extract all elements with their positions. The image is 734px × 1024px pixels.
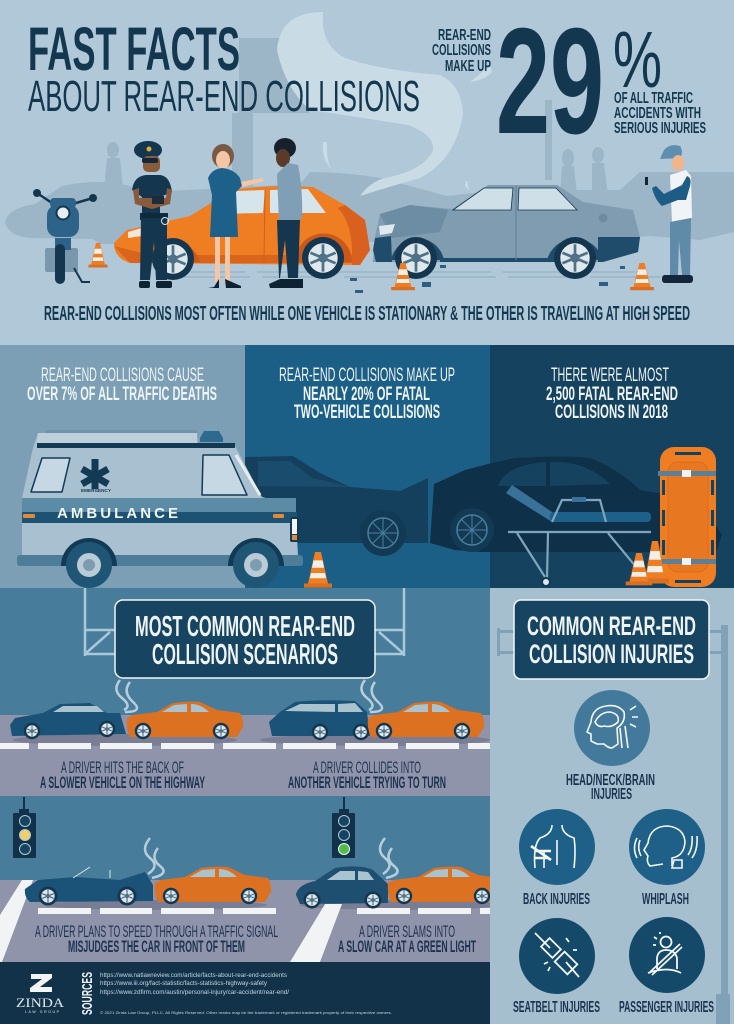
copyright: © 2021 Zinda Law Group, PLLC. All Rights Reserved. Other marks may be the trademark or registered trademark property of their respective owners. — [100, 1011, 392, 1015]
crosswalk stripes and lanes — [0, 880, 490, 962]
backboard — [658, 447, 716, 587]
source links — [100, 972, 289, 996]
road row 1 — [0, 715, 490, 796]
cone centre — [391, 263, 415, 290]
icon: head, neck and brain — [574, 690, 650, 766]
title: ABOUT REAR-END COLLISIONS — [28, 72, 420, 121]
sign: most common scenarios: COLLISION SCENARIOS — [152, 639, 338, 671]
caption: scenario 4: A DRIVER SLAMS INTO — [359, 922, 455, 941]
cone left — [88, 243, 108, 267]
icon: whiplash — [629, 809, 705, 885]
caption: scenario 4: A SLOW CAR AT A GREEN LIGHT — [338, 937, 476, 956]
sign: most common scenarios — [115, 600, 375, 678]
grey car — [373, 185, 640, 279]
stat text: fatal two-vehicle: NEARLY 20% OF FATAL — [303, 384, 430, 405]
silhouette car right — [430, 456, 722, 552]
label: head neck brain — [566, 772, 655, 803]
caption: scenario 2 — [288, 759, 446, 792]
caption: scenario 3: MISJUDGES THE CAR IN FRONT OF THEM — [68, 937, 245, 956]
source links: https://www.zdfirm.com/austin/personal-injury/car-accident/rear-end/ — [100, 989, 289, 996]
scenario 4 cars — [296, 866, 504, 908]
panel: fatal two-vehicle — [245, 345, 490, 588]
smoke wisps row 1 — [116, 680, 382, 712]
gantry pole: injuries sign — [497, 625, 730, 1024]
caption: scenario 1: A DRIVER HITS THE BACK OF — [61, 759, 184, 777]
label: whiplash: WHIPLASH — [642, 891, 689, 908]
logo: Zinda Law Group: ZINDA — [16, 995, 65, 1010]
ambulance — [17, 430, 303, 588]
label: head neck brain: INJURIES — [591, 786, 632, 803]
motorcycle — [33, 189, 97, 284]
logo: Zinda Law Group: LAW GROUP — [25, 1010, 60, 1014]
source links: https://www.iii.org/fact-statistic/facts-statistics-highway-safety — [100, 980, 268, 987]
cones on stretcher panel — [626, 541, 669, 585]
scenario 3 cars — [25, 867, 271, 906]
stat text: traffic deaths: REAR-END COLLISIONS CAUSE — [41, 365, 204, 386]
road row 2 — [0, 880, 490, 962]
stat text: fatal two-vehicle — [279, 365, 455, 423]
ambulance: EMERGENCY — [81, 488, 111, 493]
title: FAST FACTS — [28, 15, 240, 83]
icon: passenger — [629, 917, 705, 993]
gantry: scenarios sign — [85, 588, 404, 656]
cone right — [630, 263, 654, 290]
source links: https://www.natlawreview.com/article/facts-about-rear-end-accidents — [100, 972, 287, 979]
traffic light: green — [332, 797, 355, 858]
label: back: BACK INJURIES — [523, 891, 590, 908]
traffic light: yellow — [13, 797, 36, 858]
orange car — [114, 186, 370, 280]
background: header panel — [0, 0, 734, 343]
icon: seatbelt — [519, 918, 595, 994]
statistic: 29 percent: COLLISIONS — [432, 42, 491, 59]
smoke plume — [277, 12, 463, 196]
spectator with phone — [645, 145, 693, 283]
caption: scenario 1: A SLOWER VEHICLE ON THE HIGHWAY — [40, 774, 205, 792]
label: head neck brain: HEAD/NECK/BRAIN — [566, 772, 655, 789]
statistic: 29 percent: % — [613, 15, 662, 104]
caption: scenario 3: A DRIVER PLANS TO SPEED THROUGH A TRAFFIC SIGNAL — [35, 922, 278, 941]
caption: scenario 3 — [35, 922, 278, 956]
panel: scenarios — [0, 588, 490, 962]
stat text: fatal two-vehicle: TWO-VEHICLE COLLISIONS — [294, 402, 440, 423]
sign: most common scenarios: MOST COMMON REAR-END — [135, 611, 355, 643]
caption: scenario 4 — [338, 922, 476, 956]
road marks — [175, 272, 690, 277]
debris — [350, 265, 625, 293]
statistic: 29 percent: REAR-END — [438, 27, 491, 44]
label: seatbelt: SEATBELT INJURIES — [513, 999, 600, 1016]
scenario 1 cars — [10, 702, 243, 739]
road shadows row 1 — [13, 734, 490, 746]
woman — [208, 144, 264, 288]
panel: traffic deaths — [0, 345, 245, 588]
silhouette car left — [245, 456, 428, 556]
stat text: 2018 — [546, 365, 678, 423]
title — [28, 15, 420, 121]
icon: back injury — [519, 809, 595, 885]
police officer — [132, 141, 172, 288]
sign: common injuries — [514, 600, 709, 679]
caption: scenario 1 — [40, 759, 205, 792]
caption: scenario 2: A DRIVER COLLIDES INTO — [313, 759, 421, 777]
footer band — [0, 962, 490, 1024]
ambulance: AMBULANCE — [57, 505, 178, 522]
panel: fatal collisions 2018 — [490, 345, 734, 588]
man on phone — [269, 138, 303, 288]
panel: injuries — [490, 588, 734, 1024]
cone between panels — [304, 552, 332, 588]
statistic: 29 percent — [432, 0, 706, 165]
logo: Zinda Law Group — [16, 974, 65, 1014]
smoke wisps row 2 — [145, 838, 398, 878]
sources heading: SOURCES — [79, 972, 96, 1015]
stat text: traffic deaths: OVER 7% OF ALL TRAFFIC DEATHS — [27, 384, 217, 405]
stat text: fatal two-vehicle: REAR-END COLLISIONS MAKE UP — [279, 365, 455, 386]
smoke wisps small — [323, 66, 492, 190]
statistic: 29 percent: MAKE UP — [445, 58, 491, 75]
stat text: traffic deaths — [27, 365, 217, 405]
caption: scenario 2: ANOTHER VEHICLE TRYING TO TURN — [288, 774, 446, 792]
statistic: 29 percent: 29 — [496, 0, 604, 165]
scenario 2 cars — [269, 700, 484, 740]
stretcher — [506, 485, 651, 586]
road shadows row 2 — [43, 900, 500, 910]
background silhouettes: city and traffic — [5, 38, 734, 244]
lane markings row 1 — [0, 743, 490, 749]
